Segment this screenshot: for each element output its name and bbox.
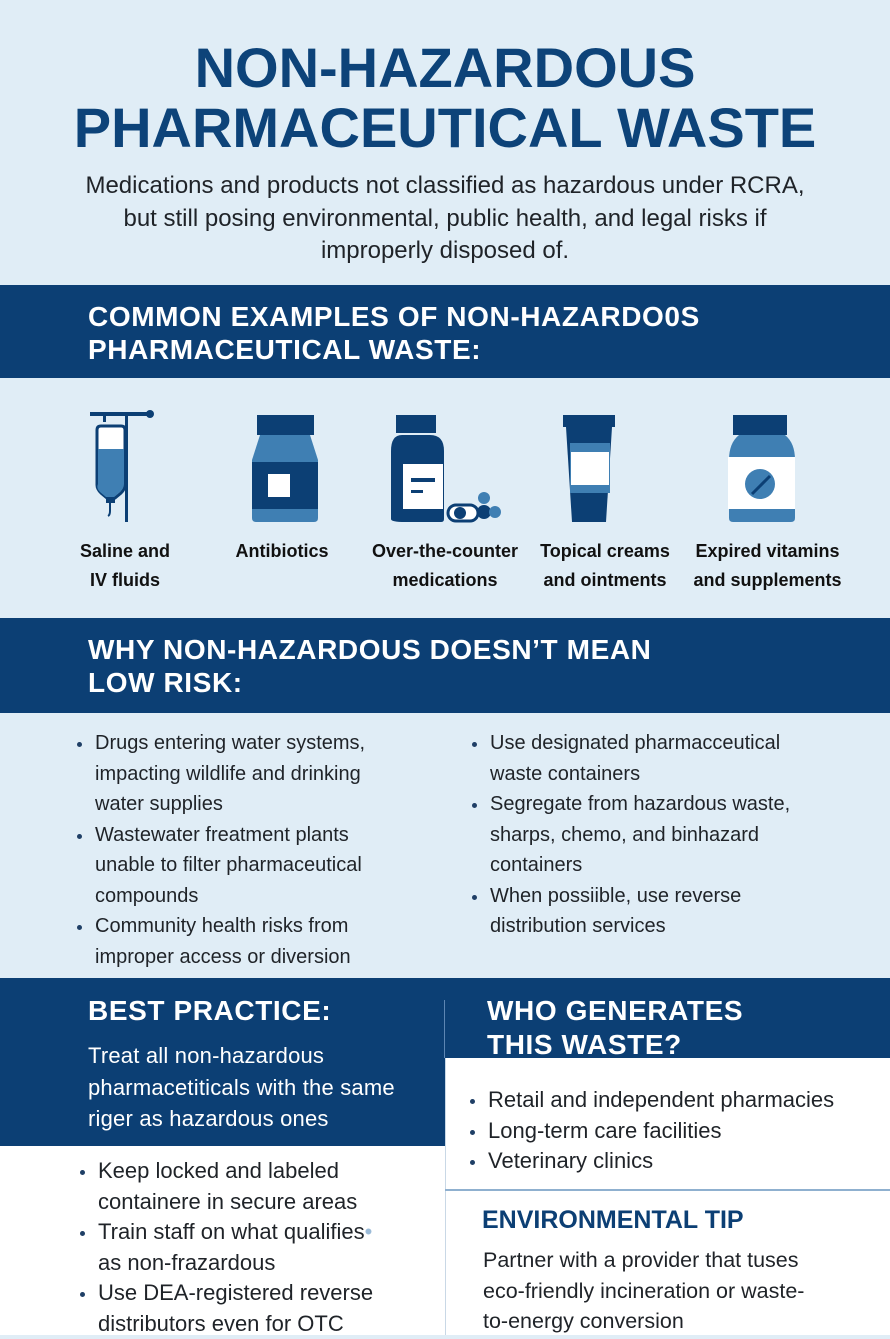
generators list: Long-term care facilities (488, 1118, 722, 1142)
risks list left: Wastewater freatment plants (95, 824, 349, 846)
best practice list: Keep locked and labeled (98, 1158, 339, 1183)
tip text: eco-friendly incineration or waste- (483, 1278, 804, 1302)
generators list (470, 1087, 834, 1173)
bottom white background (0, 978, 890, 1335)
risks list right: Segregate from hazardous waste, (490, 793, 790, 815)
labels: Saline and (80, 541, 170, 561)
band: common examples heading: PHARMACEUTICAL WASTE: (88, 334, 481, 365)
best practice list: Train staff on what qualifies• (98, 1219, 372, 1244)
best practice list: containere in secure areas (98, 1188, 357, 1214)
text: and supplements (693, 570, 842, 590)
icons row (90, 410, 795, 522)
risks list right: distribution services (490, 915, 666, 937)
panel: environmental tip (482, 1206, 804, 1333)
tip text: to-energy conversion (483, 1309, 684, 1333)
best practice list (80, 1158, 373, 1336)
tip text: Partner with a provider that tuses (483, 1248, 798, 1272)
band: common examples heading: COMMON EXAMPLES OF NON-HAZARDO0S (88, 301, 700, 332)
best practice list: Use DEA-registered reverse (98, 1280, 373, 1305)
text: Antibiotics (236, 541, 328, 561)
risks list left: unable to filter pharmaceutical (95, 854, 362, 876)
band: why heading: WHY NON-HAZARDOUS DOESN’T MEAN (88, 634, 651, 665)
risks list right: containers (490, 854, 582, 876)
icon: IV bag (90, 410, 154, 522)
labels (80, 541, 170, 590)
risks list left: compounds (95, 884, 198, 906)
text: Topical creams (540, 541, 670, 561)
best practice text: Treat all non-hazardous (88, 1043, 324, 1068)
risks list left: Community health risks from (95, 915, 348, 937)
icon: antibiotics bottle (252, 415, 318, 522)
heading: who generates: WHO GENERATES (487, 995, 743, 1026)
risks list right: When possiible, use reverse (490, 884, 741, 906)
risks list right: Use designated pharmacceutical (490, 732, 780, 754)
text: and ointments (543, 570, 666, 590)
risks list left: Drugs entering water systems, (95, 732, 365, 754)
best practice list: distributors even for OTC (98, 1310, 344, 1336)
subtitle: improperly disposed of. (321, 237, 569, 264)
labels: IV fluids (90, 570, 160, 590)
risks list left (77, 732, 365, 968)
title: PHARMACEUTICAL WASTE (74, 96, 816, 159)
heading: best practice: BEST PRACTICE: (88, 995, 331, 1026)
icon: vitamins bottle (728, 415, 795, 522)
heading: who generates (487, 995, 743, 1060)
band: why heading: LOW RISK: (88, 667, 243, 698)
text: Over-the-counter (372, 541, 518, 561)
risks list left: improper access or diversion (95, 946, 351, 968)
subtitle (85, 172, 805, 264)
best practice list: as non-frazardous (98, 1250, 275, 1274)
best practice text: pharmacetiticals with the same (88, 1074, 395, 1100)
text: Expired vitamins (695, 541, 840, 561)
tip text (483, 1248, 804, 1333)
heading: who generates: THIS WASTE? (487, 1029, 682, 1060)
text: medications (392, 570, 498, 590)
subtitle: Medications and products not classified as hazardous under RCRA, (85, 172, 805, 199)
band: common examples heading (0, 285, 890, 378)
title (74, 36, 816, 159)
best practice text: riger as hazardous ones (88, 1106, 329, 1131)
generators list: Veterinary clinics (488, 1148, 653, 1173)
risks list left: water supplies (95, 793, 223, 815)
risks list right (472, 732, 790, 937)
band: why heading (0, 618, 890, 713)
generators list: Retail and independent pharmacies (488, 1087, 834, 1112)
title: NON-HAZARDOUS (195, 36, 695, 99)
risks list left: impacting wildlife and drinking (95, 762, 361, 784)
subtitle: but still posing environmental, public health, and legal risks if (123, 204, 767, 232)
risks list right: waste containers (490, 762, 640, 784)
icon: topical cream jar (563, 415, 615, 522)
icon: OTC bottle with pills (391, 415, 501, 522)
panel: who generates (444, 978, 890, 1173)
heading: environmental tip: ENVIRONMENTAL TIP (482, 1206, 744, 1234)
best practice text (88, 1043, 395, 1131)
panel: best practice (0, 978, 445, 1336)
risks list right: sharps, chemo, and binhazard (490, 824, 759, 846)
